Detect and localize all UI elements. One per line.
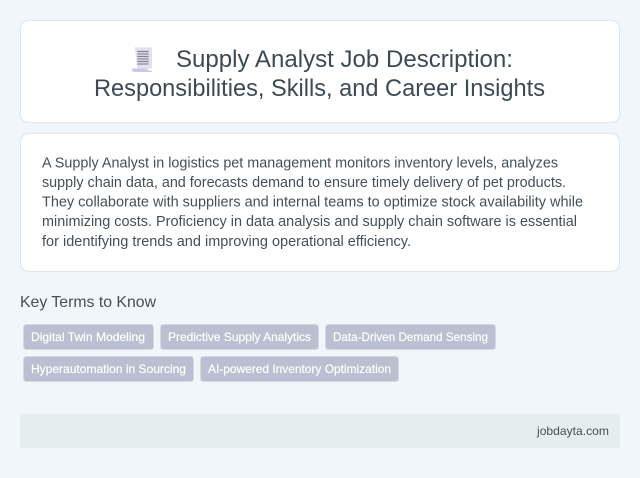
- tag: data-driven demand sensing: [326, 324, 496, 350]
- tag: ai-powered inventory optimization: AI-powered Inventory Optimization: [208, 362, 391, 376]
- tag: digital twin modeling: Digital Twin Modeling: [31, 330, 145, 344]
- description text: minimizing costs. Proficiency in data analysis and supply chain software is essential: [42, 214, 577, 230]
- icon: document receipt: [132, 47, 152, 72]
- panel: description card: [20, 134, 620, 272]
- title: Supply Analyst Job Description:: [176, 46, 513, 73]
- description text: supply chain data, and forecasts demand to ensure timely delivery of pet products.: [42, 175, 566, 191]
- tag: predictive supply analytics: Predictive Supply Analytics: [168, 330, 311, 344]
- tag: predictive supply analytics: [160, 324, 318, 350]
- title: Responsibilities, Skills, and Career Insights: [94, 75, 545, 102]
- heading: key terms: Key Terms to Know: [20, 294, 156, 311]
- tag: ai-powered inventory optimization: [200, 356, 398, 382]
- description text: for identifying trends and improving operational efficiency.: [42, 234, 411, 250]
- description text: They collaborate with suppliers and internal teams to optimize stock availability while: [42, 194, 583, 210]
- tags: key terms: [24, 324, 496, 382]
- tag: hyperautomation in sourcing: Hyperautomation in Sourcing: [31, 362, 186, 376]
- tag: digital twin modeling: [24, 324, 154, 350]
- description text: [42, 156, 583, 250]
- footer text: jobdayta.com: [536, 424, 609, 438]
- title: [94, 46, 545, 102]
- tag: data-driven demand sensing: Data-Driven Demand Sensing: [333, 330, 488, 344]
- description text: A Supply Analyst in logistics pet management monitors inventory levels, analyzes: [42, 156, 558, 172]
- tag: hyperautomation in sourcing: [24, 356, 194, 382]
- panel: title card: [20, 20, 620, 122]
- footer bar: [20, 414, 620, 448]
